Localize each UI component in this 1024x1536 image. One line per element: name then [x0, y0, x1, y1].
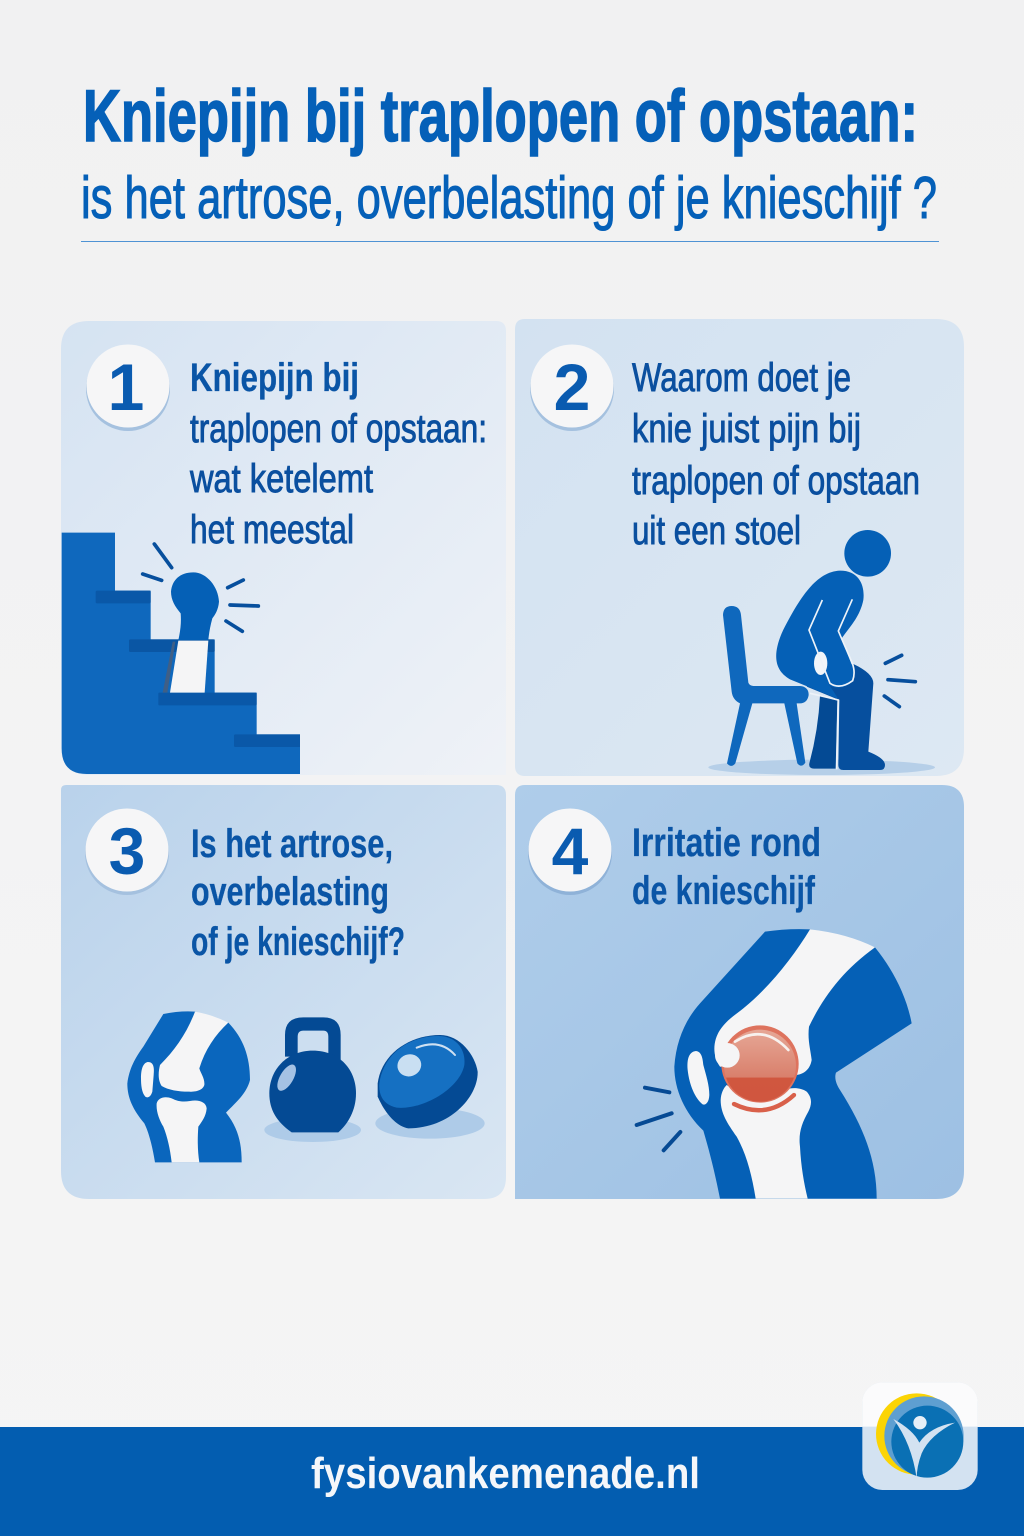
- number badge 3: [85, 808, 169, 895]
- logo: [862, 1382, 978, 1490]
- panel 3: artrose, overbelasting of knieschijf: [61, 785, 506, 1199]
- number badge 1: [86, 344, 170, 431]
- number badge 2: [530, 344, 614, 431]
- footer website: fysiovankemenade.nl: [311, 1449, 700, 1498]
- icon: knee joint: [127, 1011, 250, 1162]
- panel 3 text: overbelasting: [191, 870, 389, 914]
- panel 3 text: Is het artrose,: [191, 822, 393, 866]
- panel 1 text: het meestal: [190, 508, 354, 552]
- panel 2: waarom pijn: [515, 319, 964, 776]
- number badge 4: 4: [552, 814, 589, 888]
- icon: stairs with painful knee: [62, 533, 300, 774]
- icon: kettlebell: [264, 1017, 361, 1142]
- panel 1: wat belemmert: [61, 321, 506, 775]
- panel 1 text: Kniepijn bij: [190, 356, 359, 400]
- panel 2 text: uit een stoel: [632, 509, 801, 553]
- footer band: [0, 1427, 1024, 1536]
- title block: [81, 76, 939, 242]
- panel 2 text: Waarom doet je: [632, 356, 851, 400]
- panel 2 text: traplopen of opstaan: [632, 459, 920, 503]
- panel 2 text: [632, 356, 920, 553]
- panel 4: irritatie rond de knieschijf: [515, 785, 964, 1199]
- panel 3 text: of je knieschijf?: [191, 920, 405, 964]
- panel 1 text: [189, 356, 487, 552]
- panel 4 text: de knieschijf: [632, 869, 816, 913]
- panel 4 text: Irritatie rond: [632, 821, 821, 865]
- number badge 1: 1: [108, 350, 144, 424]
- panel 4 text: [632, 821, 821, 913]
- panel 1 text: wat ketelemt: [189, 457, 373, 501]
- number badge 2: 2: [554, 350, 590, 424]
- number badge 3: 3: [109, 814, 145, 888]
- panel 2 text: knie juist pijn bij: [632, 407, 861, 451]
- icon: person rising from chair: [708, 530, 935, 775]
- panel 1 text: traplopen of opstaan:: [190, 407, 487, 451]
- number badge 4: [528, 808, 612, 895]
- icon: knee with inflamed kneecap: [637, 929, 912, 1199]
- icons: knee, kettlebell, disc: [127, 1011, 485, 1162]
- icon: disc: [375, 1035, 485, 1139]
- panel 3 text: [191, 822, 405, 964]
